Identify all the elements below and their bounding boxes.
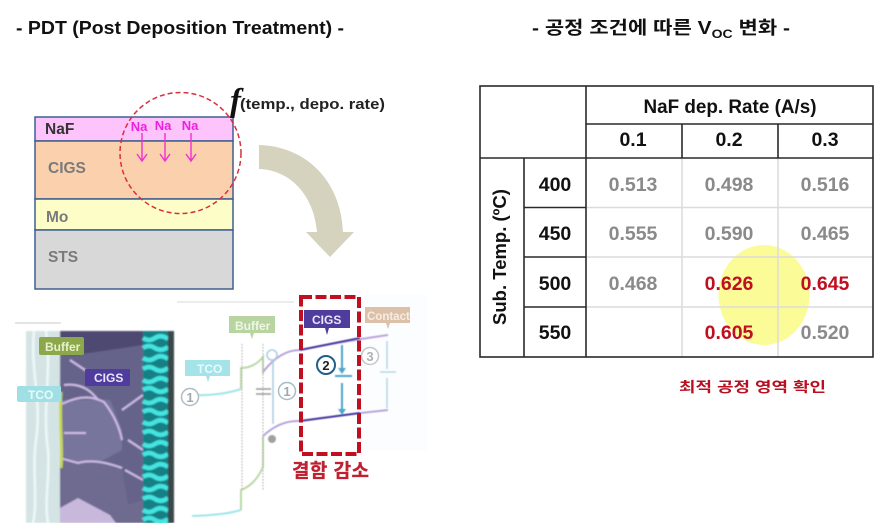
label: CIGS: CIGS	[94, 371, 123, 385]
table values: 0.645	[801, 273, 850, 295]
micrograph photo	[15, 323, 174, 523]
defect reduction label: 결함 감소	[292, 460, 369, 482]
row values: 400	[539, 174, 571, 196]
band diagram	[177, 295, 427, 516]
label: TCO: TCO	[28, 388, 53, 402]
table values: 0.605	[705, 322, 754, 344]
tag: CIGS: CIGS	[312, 313, 341, 327]
number badge 1 right	[278, 382, 296, 400]
table values: 0.520	[801, 322, 850, 344]
label: Buffer	[39, 337, 84, 355]
dashed circle highlight	[120, 92, 241, 214]
tag: CIGS	[304, 310, 350, 335]
column header: NaF dep. Rate (A/s)	[644, 96, 816, 118]
sodium diffusion arrows: Na	[131, 119, 148, 134]
layer: STS	[35, 230, 233, 289]
label: TCO	[17, 386, 61, 402]
tag: Buffer	[229, 316, 275, 339]
table: Voc	[480, 86, 873, 357]
row values: 550	[539, 322, 571, 344]
yellow optimum circle	[718, 245, 810, 345]
title: PDT heading: - PDT (Post Deposition Treatment) -	[16, 18, 344, 38]
table values: 0.555	[609, 223, 658, 245]
number badge 1 right: 1	[283, 384, 291, 399]
tag: Contact: Contact	[367, 311, 410, 323]
curved arrow	[259, 145, 354, 257]
band curves	[192, 335, 396, 516]
table values: 0.590	[705, 223, 754, 245]
layer: NaF: NaF	[45, 121, 74, 138]
sodium diffusion arrows: Na	[182, 118, 199, 133]
row values: 500	[539, 273, 571, 295]
label: Buffer: Buffer	[45, 340, 81, 354]
red dashed box	[301, 297, 359, 454]
table values: 0.498	[705, 174, 754, 196]
column values: 0.3	[811, 129, 839, 151]
layer: Mo: Mo	[46, 209, 68, 226]
table values	[609, 174, 850, 344]
optimal region caption: 최적 공정 영역 확인	[679, 379, 826, 395]
title: process condition heading: 변화 -	[733, 18, 790, 38]
column values: 0.2	[715, 129, 743, 151]
column values	[619, 129, 839, 151]
table values: 0.516	[801, 174, 850, 196]
table values: 0.626	[705, 273, 754, 295]
number badge 2: 2	[322, 358, 330, 373]
table values: 0.513	[609, 174, 658, 196]
table grid light	[586, 158, 873, 357]
number badge 2	[317, 356, 335, 374]
table values: 0.465	[801, 223, 850, 245]
label: CIGS	[85, 369, 130, 386]
column values: 0.1	[619, 129, 647, 151]
tag: TCO: TCO	[197, 362, 222, 376]
sodium diffusion arrows: Na	[155, 118, 172, 133]
number badge 1 left	[182, 388, 198, 406]
layer: STS: STS	[48, 249, 78, 266]
diagram: layer stack	[35, 117, 233, 289]
tag: Contact	[365, 307, 410, 329]
number badge 1 left: 1	[186, 390, 194, 405]
title: process condition heading: - 공정 조건에 따른 V	[532, 18, 686, 38]
number badge 3	[362, 348, 378, 364]
sodium diffusion arrows	[131, 118, 199, 161]
row header: Sub. Temp. (ºC)	[489, 189, 510, 325]
tag: TCO	[185, 360, 230, 382]
layer: CIGS	[35, 141, 233, 199]
number badge 3: 3	[366, 349, 374, 364]
layer: CIGS: CIGS	[48, 160, 86, 177]
layer: Mo	[35, 199, 233, 230]
row values	[539, 174, 571, 344]
tag: Buffer: Buffer	[235, 319, 271, 333]
table values: 0.468	[609, 273, 658, 295]
table grid dark	[480, 86, 873, 357]
row values: 450	[539, 223, 571, 245]
function arguments: (temp., depo. rate)	[240, 96, 385, 113]
function label: f	[230, 83, 244, 119]
title: process condition heading: OC	[712, 27, 733, 41]
layer: NaF	[35, 117, 233, 141]
